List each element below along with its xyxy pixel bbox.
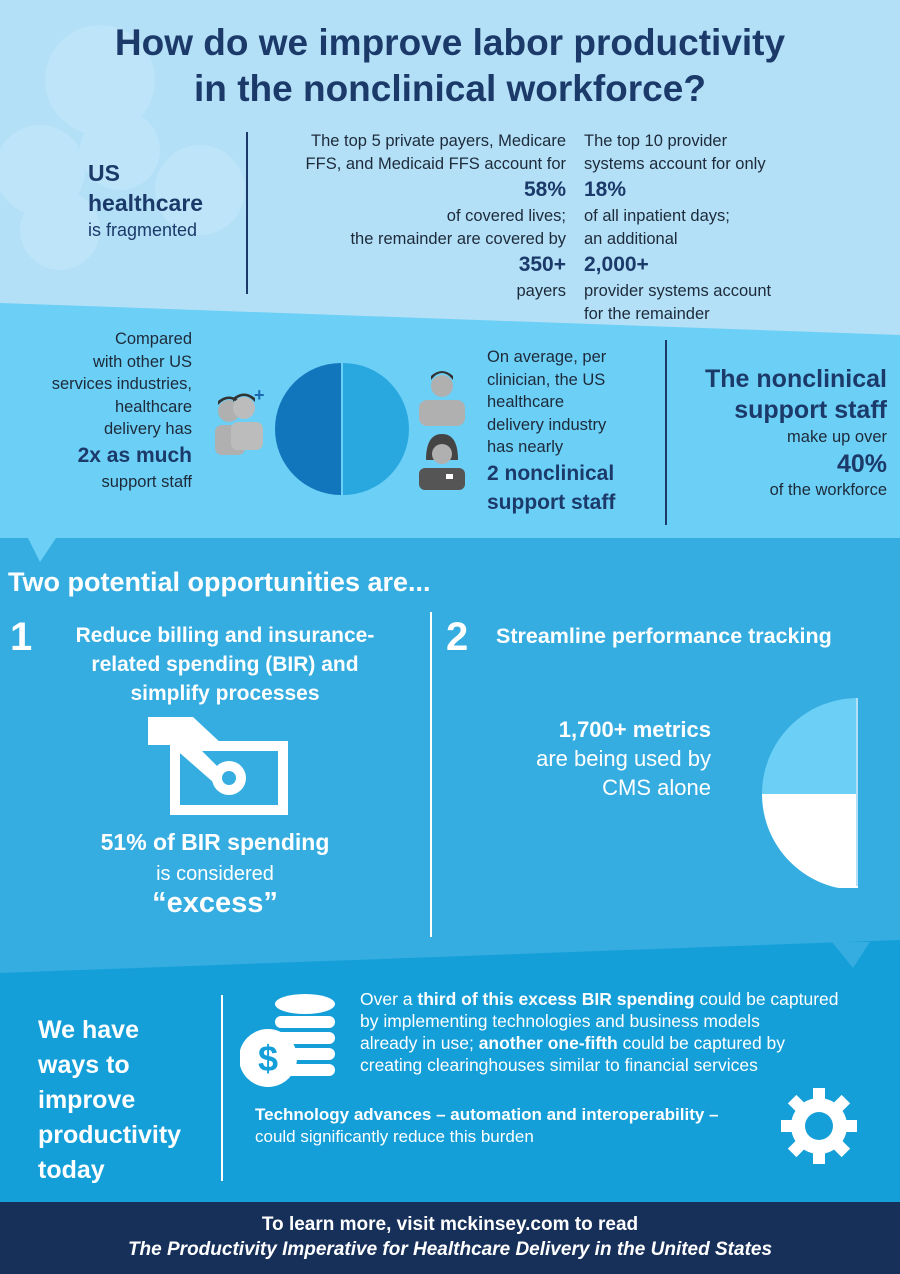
2x support staff text: services industries, — [52, 375, 192, 393]
heading: ways to improve: ways to — [38, 1051, 130, 1079]
text: technology advances: Technology advances – automation and interoperability – — [255, 1105, 719, 1124]
heading: ways to improve: We have — [38, 1016, 139, 1044]
2x support staff text: Compared — [115, 330, 192, 348]
opportunity 1 — [10, 615, 374, 919]
opportunity 1: 51% of BIR spending — [101, 829, 329, 855]
payers stat: of covered lives; — [447, 207, 566, 225]
text: third of excess: already in use; another one-fifth could be captured by — [360, 1033, 785, 1053]
40% stat: support staff — [734, 396, 887, 424]
nonclinical per clinician text: healthcare — [487, 393, 564, 411]
opportunity 1: simplify processes — [130, 682, 320, 705]
payers stat: The top 5 private payers, Medicare — [311, 132, 566, 150]
opportunity 1: 1 — [10, 615, 32, 659]
text: third of excess: Over a third of this excess BIR spending could be captured — [360, 989, 839, 1009]
US healthcare fragmented — [88, 160, 203, 240]
title: How do we improve labor productivity — [115, 22, 785, 63]
text: third of excess: creating clearinghouses similar to financial services — [360, 1055, 758, 1075]
icon: hand with bill — [148, 717, 288, 815]
provider stat: 2,000+ — [584, 253, 649, 276]
provider stat — [584, 132, 771, 322]
nonclinical per clinician text: has nearly — [487, 438, 563, 456]
pie: metrics — [762, 698, 858, 888]
heading: two opportunities: Two potential opportunities are... — [8, 567, 431, 597]
heading: ways to improve — [38, 1016, 181, 1184]
provider stat: The top 10 provider — [584, 132, 727, 150]
icon: two people: + — [254, 385, 265, 405]
text: technology advances — [255, 1105, 719, 1146]
provider stat: provider systems account — [584, 282, 771, 300]
icon: clinician and staff — [419, 371, 465, 490]
payers stat — [306, 132, 566, 300]
nonclinical per clinician text — [487, 348, 616, 514]
US healthcare fragmented: healthcare — [88, 190, 203, 216]
pie: half/half — [275, 363, 409, 495]
icon: gear — [781, 1088, 857, 1164]
provider stat: an additional — [584, 230, 678, 248]
2x support staff text: delivery has — [104, 420, 192, 438]
nonclinical per clinician text: On average, per — [487, 348, 606, 366]
40% stat: of the workforce — [770, 480, 887, 498]
opportunity 1: is considered — [156, 863, 274, 885]
40% stat: 40% — [837, 450, 887, 478]
2x support staff text: 2x as much — [78, 444, 192, 466]
provider stat: systems account for only — [584, 154, 766, 172]
provider stat: for the remainder — [584, 304, 710, 322]
US healthcare fragmented: is fragmented — [88, 220, 197, 240]
2x support staff text: support staff — [101, 472, 192, 490]
icon: coins: $ — [258, 1038, 278, 1079]
40% stat — [705, 365, 887, 498]
US healthcare fragmented: US — [88, 160, 120, 186]
2x support staff text: healthcare — [115, 398, 192, 416]
opportunity 2: are being used by — [536, 746, 711, 771]
footer: To learn more, visit mckinsey.com to read — [262, 1214, 638, 1235]
opportunity 2 — [446, 615, 832, 800]
opportunity 1: Reduce billing and insurance- — [76, 624, 374, 647]
provider stat: of all inpatient days; — [584, 207, 730, 225]
40% stat: The nonclinical — [705, 365, 887, 393]
text: third of excess — [360, 989, 839, 1075]
payers stat: payers — [516, 282, 566, 300]
text: technology advances: could significantly reduce this burden — [255, 1127, 534, 1146]
payers stat: 350+ — [519, 253, 566, 276]
payers stat: 58% — [524, 178, 566, 201]
payers stat: FFS, and Medicaid FFS account for — [306, 154, 566, 172]
provider stat: 18% — [584, 178, 626, 201]
divider — [430, 612, 432, 937]
opportunity 2: Streamline performance tracking — [496, 624, 832, 648]
footer: The Productivity Imperative for Healthcare Delivery in the United States — [128, 1239, 772, 1260]
2x support staff text: with other US — [93, 352, 192, 370]
text: third of excess: by implementing technologies and business models — [360, 1011, 760, 1031]
nonclinical per clinician text: 2 nonclinical — [487, 462, 614, 484]
opportunity 2: 1,700+ metrics — [559, 717, 711, 742]
icon: two people — [215, 385, 265, 455]
opportunity 1: related spending (BIR) and — [91, 653, 359, 676]
heading: ways to improve: today — [38, 1156, 105, 1184]
title: in the nonclinical workforce? — [194, 68, 706, 109]
opportunity 2: CMS alone — [602, 775, 711, 800]
opportunity 2: 2 — [446, 615, 468, 659]
40% stat: make up over — [787, 428, 887, 446]
2x support staff text — [52, 330, 192, 490]
title — [115, 22, 785, 109]
opportunity 1: “excess” — [152, 887, 278, 919]
payers stat: the remainder are covered by — [350, 230, 566, 248]
footer — [128, 1214, 772, 1260]
nonclinical per clinician text: support staff — [487, 490, 615, 514]
nonclinical per clinician text: delivery industry — [487, 416, 606, 434]
divider — [246, 132, 248, 294]
nonclinical per clinician text: clinician, the US — [487, 370, 605, 388]
heading: ways to improve: improve — [38, 1086, 135, 1114]
icon: coins — [240, 994, 335, 1087]
heading: ways to improve: productivity — [38, 1121, 181, 1149]
divider — [665, 340, 667, 525]
